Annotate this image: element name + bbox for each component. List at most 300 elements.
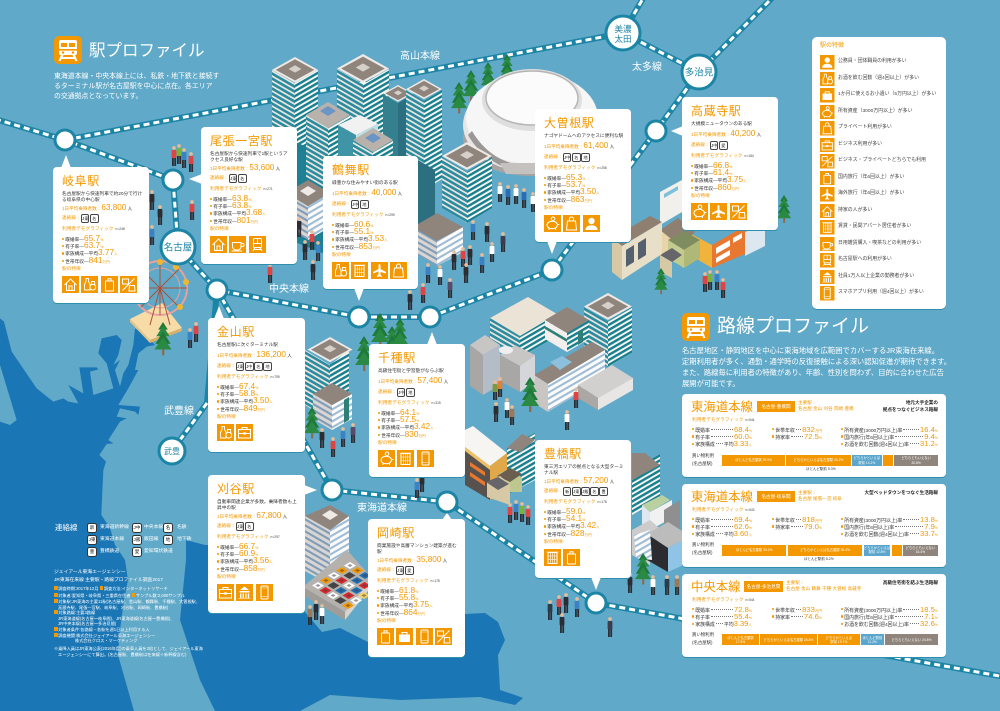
station card: Toyohashi: 名 [592,488,597,494]
station card: Owari-Ichinomiya: 世帯年収―801万円 [213,215,258,225]
panel: station features legend: 国内旅行（年6回以上）が多い [838,174,904,180]
panel: Tokaido line Nagoya-Gifu: 駅前 12.8% [869,550,885,554]
station card: Okazaki: 連絡線： [377,567,395,572]
station card: Gifu: 利用者デモグラフィック n=248 [62,226,125,230]
station card: Tsurumai: 利用者デモグラフィック n=259 [332,212,395,216]
panel: Tokaido line Nagoya-Toyohashi: 名古屋 金山 刈谷 岡崎 豊橋 [798,406,854,411]
station card: Gifu: 1日平均乗降者数：63,800 人 [62,203,132,212]
station card: Kariya: 利用者デモグラフィック n=297 [217,534,280,538]
panel: Tokaido line Nagoya-Toyohashi: どちらかといえば名古屋駅 30.2% [794,458,843,462]
station card: Gifu: 連絡線： [62,215,80,220]
survey credit text: 調査機関:株式会社ジェイアール東海エージェンシー [58,632,155,638]
station card: Kozoji: 既婚率―66.8% [694,160,732,170]
panel: station features legend: 1か月に使えるお小遣い（5万円以上）が多い [838,92,936,97]
panel: Tokaido line Nagoya-Gifu: 79.0 [804,522,819,531]
station card: Kariya: 自動車関連企業が多数。乗降者数も上昇中の駅 [217,498,297,510]
survey credit text: 調査時期:2017年12月 調査方法:インターネットリサーチ [58,586,168,591]
panel: Tokaido line Nagoya-Gifu: 利用者デモグラフィック n=543 [692,507,754,512]
station card: Tsurumai: J中 [352,202,358,206]
station card: Kozoji: 大規模ニュータウンのある駅 [691,120,752,126]
connecting lines legend: J東 [89,537,95,542]
panel: Tokaido line Nagoya-Toyohashi: 9.4 [924,432,935,441]
panel: Chuo line Nagoya-Tajimi: お酒を飲む回数(週4回以上)率 [844,623,909,628]
panel: station features legend: スマホアプリ利用（週4回以上）が多い [838,290,924,295]
station card: Okazaki: 駅の特徴 [377,618,396,623]
panel: Tokaido line Nagoya-Toyohashi: どちらかといえば [854,456,880,460]
panel: Tokaido line Nagoya-Toyohashi: (名古屋駅) [692,461,712,466]
panel: Tokaido line Nagoya-Gifu: ほとんど名古屋駅 30.2% [736,548,772,552]
station card: Kozoji: 愛 [721,142,725,148]
bay: Nagoya port sea [0,318,523,711]
panel: station features legend: 社員1万人以上企業の勤務者が多い [838,274,914,278]
station card: Kanayama: J中 [246,364,252,368]
panel: Chuo line Nagoya-Tajimi: 55.4 [734,612,749,621]
panel: Tokaido line Nagoya-Gifu: 家族構成 平均 [695,533,734,538]
station card: Okazaki: 世帯年収―864万円 [380,607,425,617]
station card: Ozone: 1日平均乗降者数：61,400 人 [544,141,614,150]
station card: Owari-Ichinomiya: 家族構成―平均3.68人 [213,207,266,217]
panel: Chuo line Nagoya-Tajimi: 名古屋-多治見間 [747,584,780,589]
panel: Chuo line Nagoya-Tajimi: % [935,616,938,620]
station card: Ozone: 既婚率―65.3% [547,172,585,182]
connecting lines legend: J中 [134,525,140,530]
panel: Tokaido line Nagoya-Gifu: % [749,526,752,530]
panel: Chuo line Nagoya-Tajimi: 所有資産(3000万円以上)率 [844,608,902,614]
intro text: route profile: 定期利用者が多く、通勤・通学時の反復接触による深い認知促進が期待できます。 [682,356,951,366]
heading: route profile: 路線プロファイル [717,316,869,337]
intro text: station profile [54,72,219,100]
panel: Tokaido line Nagoya-Gifu: 東海道本線 [691,490,753,504]
panel: station features legend: 日用雑貨購入・喫茶などの利用が多い [838,240,921,246]
station card: Kariya: 連絡線： [217,523,235,528]
station card: Kariya [208,475,305,613]
panel: Chuo line Nagoya-Tajimi: 72.8 [734,604,749,614]
station card: Kanayama: 1日平均乗降者数：136,200 人 [217,350,292,359]
panel: Tokaido line Nagoya-Toyohashi: % [935,428,938,432]
station card: Tsurumai: 既婚率―60.6% [335,218,373,228]
panel: station features legend [812,37,946,309]
panel: Tokaido line Nagoya-Toyohashi: % [819,436,822,440]
station card: Tsurumai: 鶴舞駅 [332,163,370,177]
station card: Toyohashi: 豊橋駅 [544,447,582,461]
panel: Tokaido line Nagoya-Toyohashi: 買い物利用 [692,453,714,458]
panel: Tokaido line Nagoya-Toyohashi: % [935,436,938,440]
station card: Kanayama: 地 [265,364,270,368]
trees behind stadium [451,54,514,114]
panel: Tokaido line Nagoya-Toyohashi: 駅前 14.2% [858,460,875,464]
intro text: route profile: 展開が可能です。 [682,378,740,388]
station card: Kozoji: 1日平均乗降者数：40,200 人 [691,129,761,138]
survey credit text [54,568,203,657]
survey credit text: 対象駅:JR東海の主要11駅(名古屋駅、金山駅、鶴舞駅、千種駅、大曽根駅、 [58,599,200,604]
panel: Tokaido line Nagoya-Gifu: % [935,518,938,522]
station card: Toyohashi: 東三河エリアの拠点となる大型ターミナル駅 [544,464,624,474]
ozone houses [612,216,662,280]
panel: station features legend: 持家の人が多い [838,208,872,212]
station card: Kozoji: 家族構成―平均3.75人 [694,174,747,184]
station card: Kozoji: 世帯年収―860万円 [694,182,739,192]
panel: Chuo line Nagoya-Tajimi: 833 [802,604,815,614]
panel: Tokaido line Nagoya-Gifu: どちらかといえば名古屋駅 35.4% [800,548,850,552]
panel: station features legend: ビジネス利用が多い [838,142,882,146]
station card: Ozone: ナゴヤドームへのアクセスに便利な駅 [544,132,623,138]
panel: Tokaido line Nagoya-Gifu: 大型ベッドタウンをつなぐ生活路線 [864,490,938,495]
panel: Tokaido line Nagoya-Gifu: 持家率 [775,526,790,531]
connecting lines legend: 愛 [135,549,139,554]
panel: Chuo line Nagoya-Tajimi: 駅前 19.7% [830,640,847,644]
office towers: north cluster [272,54,492,266]
panel: Tokaido line Nagoya-Gifu: 69.4 [734,514,749,524]
station card: Owari-Ichinomiya: 既婚率―63.8% [213,192,251,202]
parked cars [312,562,371,609]
station card: Gifu: 世帯年収―841万円 [65,255,110,265]
panel: Tokaido line Nagoya-Toyohashi: 20.8% [911,460,921,464]
station card: Chikusa: 千種駅 [378,351,416,365]
station card: Kariya: 刈谷駅 [217,482,255,496]
station card: Toyohashi [535,440,631,578]
panel: Tokaido line Nagoya-Toyohashi: 利用者デモグラフィック n=544 [692,417,754,422]
survey credit text: JR東海道線(名古屋～岐阜間)、JR東海道線(名古屋～豊橋間)、 [58,616,174,620]
survey credit text: エージェンシーにて算出。(名古屋駅、豊橋駅は在来線＋新幹線含む) [58,652,186,657]
panel: Tokaido line Nagoya-Gifu: 世帯年収 [775,518,795,524]
tree near Toyohashi [635,553,651,584]
station card: Owari-Ichinomiya: 駅の特徴 [210,226,229,231]
panel: station features legend: 名古屋駅への利用が多い [838,257,892,262]
trees Kozoji [654,195,791,294]
panel: Tokaido line Nagoya-Toyohashi [682,394,946,477]
station card: Chikusa: 高級住宅街と学習塾がならぶ駅 [378,368,444,372]
panel: Tokaido line Nagoya-Gifu: 人 [748,533,752,537]
station node: Tajimi: 多治見 [685,66,714,78]
station card: Chikusa: 有子率―57.5% [381,414,419,424]
station node: Tajimi [682,55,716,89]
panel: Tokaido line Nagoya-Gifu: どちらともいえない [906,546,935,550]
station marker: Chikusa [420,307,440,327]
panel: Tokaido line Nagoya-Toyohashi: どちらともいえない [901,456,931,460]
panel: Tokaido line Nagoya-Toyohashi: 832 [802,424,815,434]
panel: Tokaido line Nagoya-Toyohashi: 既婚率 [695,428,710,434]
panel: Tokaido line Nagoya-Gifu: 7.9 [924,522,935,531]
station card: Kanayama: 有子率―58.8% [220,388,258,398]
station marker: Kozoji [646,121,666,141]
station card: Gifu: 駅の特徴 [62,266,81,271]
station card: Kariya: 有子率―60.9% [220,548,258,558]
station card: Kozoji: 利用者デモグラフィック n=184 [691,152,754,158]
panel: Tokaido line Nagoya-Toyohashi: 16.4 [920,424,935,434]
station card: Kanayama: 名 [256,364,261,368]
panel: Chuo line Nagoya-Tajimi: ほとんど駅前 [862,636,882,640]
station card: Toyohashi: 家族構成―平均3.42人 [547,520,600,530]
panel: Chuo line Nagoya-Tajimi: 万円 [815,608,822,612]
panel: Chuo line Nagoya-Tajimi: ほとんど名古屋駅 [727,636,754,640]
panel: Tokaido line Nagoya-Gifu: 買い物利用 [692,542,714,547]
intro text: station profile: の交通拠点となっています。 [54,93,142,100]
panel: Chuo line Nagoya-Tajimi: 人 [748,623,752,627]
station card: Kariya: J東 [237,524,243,528]
panel: Tokaido line Nagoya-Toyohashi: 家族構成 平均 [695,443,734,448]
panel: Chuo line Nagoya-Tajimi: 11.2% [868,640,877,644]
panel: Chuo line Nagoya-Tajimi: (名古屋駅) [692,640,712,645]
station card: Kariya: 世帯年収―858万円 [220,563,265,573]
station card: Kanayama: 家族構成―平均3.50人 [220,395,273,405]
station card: Owari-Ichinomiya: 連絡線： [210,175,228,180]
station card: Kanayama: 世帯年収―849万円 [220,403,265,413]
panel: Tokaido line Nagoya-Gifu: (名古屋駅) [692,550,712,555]
station card: Owari-Ichinomiya [201,127,297,264]
panel: station features legend: 所有資産（3000万円以上）が多い [838,108,912,114]
survey credit text: 高蔵寺駅、尾張一宮駅、岐阜駅、刈谷駅、岡崎駅、豊橋駅) [58,604,168,610]
panel: Tokaido line Nagoya-Gifu: 主要駅： [798,490,816,495]
apartments and houses south of Chikusa [465,426,535,505]
rail line labels: 中央本線 [269,282,309,295]
connecting lines legend: 新 [90,525,94,530]
panel: Tokaido line Nagoya-Gifu: 有子率 [695,526,710,531]
rail line labels: 太多線 [632,60,662,73]
connecting lines legend: J飯 [134,537,140,542]
station card: Toyohashi: 新 [565,488,569,494]
station card: Gifu: 家族構成―平均3.77人 [65,247,118,257]
panel: Chuo line Nagoya-Tajimi: 高級住宅街を結ぶ生活路線 [883,580,938,585]
panel: Tokaido line Nagoya-Gifu [682,484,946,567]
station card: Chikusa: J中 [398,390,404,394]
station card: Tsurumai: 連絡線： [332,201,350,206]
station node: Nagoya [161,230,195,264]
panel: Tokaido line Nagoya-Toyohashi: お酒を飲む回数(週4回以上)率 [844,443,909,448]
station marker: Ozone [542,260,562,280]
station card: Toyohashi: 既婚率―59.0% [547,506,585,516]
intro text: station profile: るターミナル駅が名古屋駅を中心に点在。各エリア [54,83,212,90]
Kozoji neighbourhood [660,180,765,278]
panel: Tokaido line Nagoya-Toyohashi: 31.2 [920,439,935,448]
connecting lines legend: 名鉄 [177,525,187,530]
station card: Kanayama: 金山駅 [217,325,255,339]
panel: Tokaido line Nagoya-Gifu: どちらかといえば [864,546,890,550]
station card: Kanayama: 名古屋駅に次ぐターミナル駅 [217,342,278,346]
station node: Taketoyo: 武豊 [164,446,180,456]
panel: Chuo line Nagoya-Tajimi: 32.6 [920,619,935,628]
station card: Toyohashi: 豊 [601,488,606,494]
station card: Okazaki: 利用者デモグラフィック n=178 [377,578,440,582]
station card: Kozoji: J中 [711,142,717,148]
connecting lines legend: 地下鉄 [177,537,191,542]
survey credit text: ※乗降人員はJR東海公表(2016年度)の乗車人員を2倍として、ジェイアール東海 [54,646,203,651]
station card: Okazaki: 岡崎駅 [377,526,415,540]
station card: Ozone: 世帯年収―863万円 [547,194,592,204]
station card: Chikusa: 既婚率―64.1% [381,406,419,416]
station marker: Owari-Ichinomiya [163,170,183,190]
buildings near Kanayama [305,337,352,430]
station card: Ozone: J中 [564,154,570,160]
panel: Tokaido line Nagoya-Toyohashi: 国内旅行(年6回以上)率 [844,436,894,441]
station card: Okazaki: J東 [397,568,403,572]
panel: Tokaido line Nagoya-Toyohashi: ほとんど駅前 5.3% [806,467,836,471]
panel: station features legend: 賃貸・民間アパート居住者が多い [838,224,911,229]
panel: Chuo line Nagoya-Tajimi [682,574,946,657]
station card: Kariya: 既婚率―66.7% [220,540,258,550]
station card: Toyohashi: 有子率―54.1% [547,513,585,523]
panel: Tokaido line Nagoya-Toyohashi: ほとんど名古屋駅 29.5% [735,458,772,462]
panel: Tokaido line Nagoya-Toyohashi: 東海道本線 [691,400,753,414]
station card: Ozone: 名 [574,154,578,160]
station card: Toyohashi: 利用者デモグラフィック n=178 [544,498,607,504]
survey credit text: 対象路線:主要3路線 [58,610,95,614]
panel: Tokaido line Nagoya-Toyohashi: 所有資産(3000万円以上)率 [844,428,902,434]
station card: Okazaki: 愛 [407,568,411,572]
station card: Kanayama [208,318,305,452]
intro text: route profile: 名古屋地区・静岡地区を中心に東海地域を広範囲でカバーするJR東海在来線。 [682,346,939,354]
station card: Owari-Ichinomiya: 尾張一宮駅 [210,134,273,148]
panel: Tokaido line Nagoya-Gifu: 国内旅行(年6回以上)率 [844,526,894,531]
panel: Chuo line Nagoya-Tajimi: 名古屋 金山 鶴舞 千種 大曽根 高蔵寺 [786,586,861,591]
station card: Tsurumai: 駅の特徴 [332,252,351,257]
station card: Chikusa: 駅の特徴 [378,440,397,445]
station card: Toyohashi: 1日平均乗降者数：57,200 人 [544,476,614,485]
connecting lines legend [55,523,192,557]
panel: Tokaido line Nagoya-Gifu: お酒を飲む回数(週4回以上)率 [844,533,909,538]
station node: Mino-Ota: 美濃 [614,24,632,34]
station card: Ozone: 大曽根駅 [544,116,594,130]
station card: Kozoji: 有子率―61.4% [694,167,732,177]
rail line labels: 武豊線 [164,404,194,417]
station node: Mino-Ota: 太田 [614,34,632,44]
station card: Chikusa: 家族構成―平均3.42人 [381,421,434,431]
panel: Chuo line Nagoya-Tajimi: どちらかといえば [826,636,852,640]
rail line labels [164,49,662,514]
station card: Kozoji [682,97,778,230]
station card: Toyohashi: J飯 [582,488,589,494]
station marker: Tsurumai [349,307,369,327]
panel: Tokaido line Nagoya-Toyohashi: 拠点をつなぐビジネス路線 [883,407,938,412]
rail line labels: 高山本線 [400,49,440,62]
panel: Tokaido line Nagoya-Gifu: 13.8 [920,514,935,524]
survey credit text: 株式会社クロス・マーケティング [75,638,137,643]
panel: Tokaido line Nagoya-Toyohashi: 持家率 [775,436,790,441]
Kariya office and parking [303,505,372,620]
panel: Tokaido line Nagoya-Toyohashi: 3.33 [734,439,748,448]
station card: Owari-Ichinomiya: 有子率―63.8% [213,200,251,210]
station marker: Toyohashi [586,593,606,613]
panel: Tokaido line Nagoya-Gifu: % [935,526,938,530]
station card: Owari-Ichinomiya: 名 [240,176,244,180]
station card: Tsurumai [323,156,418,289]
station card: Owari-Ichinomiya: 名古屋駅から快速列車で1駅というアクセス良好な駅 [210,150,288,162]
station card: Gifu: 名古屋駅から快速列車で約20分で行ける岐阜県の中心駅 [62,190,142,202]
survey credit text: ジェイアール東海エージェンシー [54,570,126,575]
panel: station features legend: 駅の特徴 [820,43,844,49]
station card: Toyohashi: 世帯年収―828万円 [547,528,592,538]
panel: Tokaido line Nagoya-Gifu: 名古屋 尾張一宮 岐阜 [798,496,842,501]
panel: station features legend: 海外旅行（年6回以上）が多い [838,191,904,196]
intro text: route profile: また、路線毎に利用者の特徴があり、年齢、性別を問わず、目的に合わせた広告 [682,368,944,376]
panel: station features legend: 公務員・団体職員の利用が多い [838,59,906,64]
station card: Toyohashi: J東 [573,488,580,494]
panel: Tokaido line Nagoya-Gifu: 3.60 [734,529,748,538]
station card: Kanayama: 既婚率―67.4% [220,380,258,390]
station card: Tsurumai: 1日平均乗降者数：40,000 人 [332,188,402,197]
tree by ferris wheel [154,322,172,355]
heading: station profile [54,36,204,64]
station card: Tsurumai: 世帯年収―853万円 [335,241,380,251]
station card: Kariya: 駅の特徴 [217,574,236,579]
station card: Kozoji: 連絡線： [691,142,709,147]
station card: Gifu: 岐阜駅 [62,174,100,188]
survey credit text: JR中央本線(名古屋～多治見間) [58,621,116,626]
panel: Tokaido line Nagoya-Gifu: 818 [802,514,815,524]
station card: Kanayama: 連絡線： [217,363,235,368]
station card: Ozone: 有子率―53.7% [547,179,585,189]
station card: Kariya: 家族構成―平均3.56人 [220,555,273,565]
station card: Ozone: 利用者デモグラフィック n=256 [544,164,607,170]
station card: Kanayama: J東 [237,364,243,368]
station card: Chikusa: 地 [408,390,412,394]
station card: Kozoji: 駅の特徴 [691,193,710,198]
connecting lines legend: 名 [166,525,170,530]
panel: Tokaido line Nagoya-Gifu: % [935,533,938,537]
panel: Tokaido line Nagoya-Toyohashi: % [749,428,752,432]
panel: Chuo line Nagoya-Tajimi: 17.5% [736,640,745,644]
station card: Toyohashi: 連絡線： [544,488,562,493]
station card: Ozone: 駅の特徴 [544,205,563,210]
panel: Chuo line Nagoya-Tajimi: 74.6 [804,612,819,621]
panel: Chuo line Nagoya-Tajimi: 利用者デモグラフィック n=544 [692,597,754,602]
connecting lines legend: 東海道本線 [100,537,124,542]
station card: Ozone: 地 [583,154,588,160]
station card: Ozone [535,109,631,242]
survey credit text: 対象者条件:各路線・各駅を週1日以上利用する人 [58,626,150,632]
intro text: station profile: 東海道本線・中央本線上には、私鉄・地下鉄と接続す [54,73,219,80]
panel: station features legend: プライベート利用が多い [838,125,892,130]
heading: route profile [682,313,869,341]
buildings east of Toyohashi [632,453,690,572]
central-east building cluster [470,293,633,412]
connecting lines legend: 豊 [90,549,94,554]
station card: Chikusa: 利用者デモグラフィック n=315 [378,400,441,404]
panel: Chuo line Nagoya-Tajimi: 中央本線 [691,580,741,594]
station card: Okazaki [368,519,465,657]
station card: Chikusa: 連絡線： [378,389,396,394]
panel: Chuo line Nagoya-Tajimi: 国内旅行(年6回以上)率 [844,616,894,621]
station card: Owari-Ichinomiya: 利用者デモグラフィック n=271 [210,186,273,190]
panel: Tokaido line Nagoya-Gifu: % [749,518,752,522]
station card: Kanayama: 利用者デモグラフィック n=759 [217,374,280,378]
station card: Gifu: 既婚率―65.7% [65,232,103,242]
station card: Tsurumai: 有子率―55.1% [335,226,373,236]
panel: Chuo line Nagoya-Tajimi: 既婚率 [695,608,710,614]
station card: Ozone: 家族構成―平均3.50人 [547,186,600,196]
nagoya dome stadium [463,69,601,176]
intro text: route profile [682,346,951,388]
station marker: Kanayama [207,280,227,300]
ferris wheel [130,259,189,343]
panel: station features legend: ビジネス・プライベートどちらでも利用 [838,158,926,163]
panel: Tokaido line Nagoya-Toyohashi: 68.4 [734,424,749,434]
panel: Tokaido line Nagoya-Gifu: 万円 [815,518,822,522]
station node: Nagoya: 名古屋 [164,242,192,254]
panel: Chuo line Nagoya-Tajimi: 7.1 [924,612,935,621]
station card: Okazaki: 1日平均乗降者数：35,800 人 [377,555,447,564]
panel: Tokaido line Nagoya-Toyohashi: 有子率 [695,436,710,441]
station card: Gifu [53,167,149,303]
panel: Tokaido line Nagoya-Toyohashi: 主要駅： [798,400,816,405]
panel: Tokaido line Nagoya-Toyohashi: 万円 [815,428,822,432]
station marker: Kariya [322,480,342,500]
panel: Tokaido line Nagoya-Gifu: 名古屋-岐阜間 [761,494,791,499]
station card: Ozone: 連絡線： [544,154,562,159]
station card: Gifu: 名 [92,216,96,220]
panel: Tokaido line Nagoya-Toyohashi: % [935,443,938,447]
panel: Chuo line Nagoya-Tajimi: % [749,616,752,620]
station card: Tsurumai: 地 [362,202,366,206]
